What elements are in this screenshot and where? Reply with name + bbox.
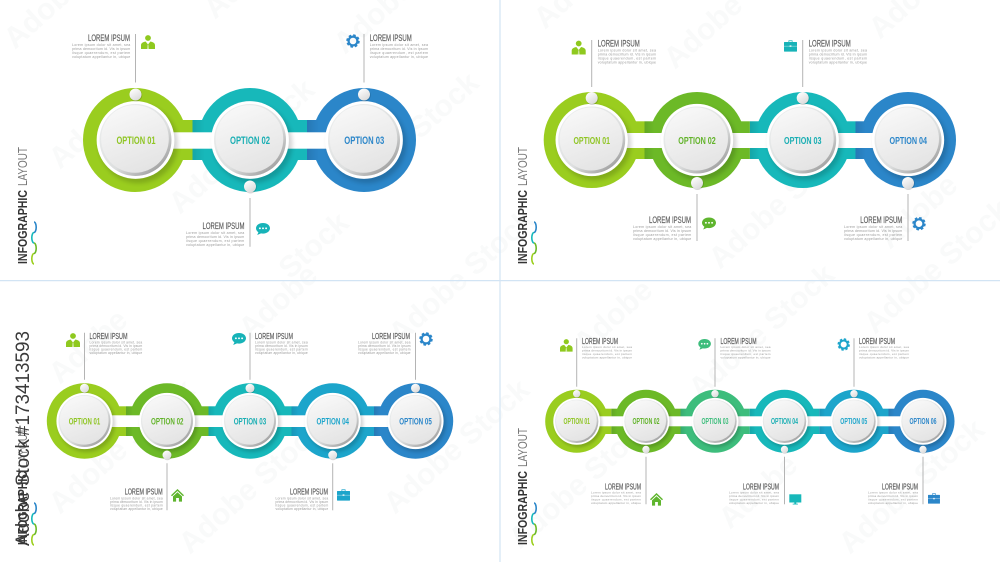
callout 1: LOREM IPSUM (582, 337, 618, 346)
callout 1: iisque quaerendum, est partem (582, 352, 632, 356)
callout 3: iisque quaerendum, est partem (720, 352, 771, 356)
option 01 ring (47, 383, 126, 459)
white connector band (577, 416, 923, 426)
callout 1: Lorem ipsum dolor sit amet, sea (90, 340, 142, 344)
option 02 button: OPTION 02 (678, 135, 716, 147)
side title: INFOGRAPHIC (15, 190, 30, 264)
wave logo (532, 503, 536, 545)
option 02 ring (192, 88, 307, 192)
option 06 button: OPTION 06 (910, 417, 937, 426)
callout 4: LOREM IPSUM (860, 215, 902, 225)
callout 4: iisque quaerendum, est partem (844, 233, 902, 237)
option 01 button (56, 384, 115, 452)
side title: LAYOUT (515, 147, 530, 186)
callout 3: prima democritum id. Vis in ipsum (370, 47, 428, 51)
option 03 button: OPTION 03 (234, 416, 266, 426)
watermarks: Stock (403, 66, 486, 145)
callout 5 (358, 332, 432, 380)
callout 4: prima democritum id. Vis in ipsum (729, 494, 779, 498)
callout 2: LOREM IPSUM (649, 215, 691, 225)
option 02 button (139, 393, 198, 460)
option 01 button: OPTION 01 (116, 135, 156, 147)
callout 6 (868, 457, 940, 505)
callout 2: prima democritum id. Vis in ipsum (591, 494, 641, 498)
icon: speech bubble (256, 223, 270, 235)
option 03 ring (208, 383, 292, 459)
option 05 button: OPTION 05 (840, 417, 868, 426)
callout 1: prima democritum id. Vis in ipsum (598, 52, 656, 56)
option 01 ring (545, 390, 611, 453)
option 03 ring (680, 390, 750, 453)
callout 2: Lorem ipsum dolor sit amet, sea (110, 496, 163, 500)
option 04 button (305, 393, 363, 460)
side title: INFOGRAPHIC (15, 471, 30, 545)
callout 5: LOREM IPSUM (859, 337, 895, 346)
option 05 ring (374, 383, 453, 459)
option 02 button: OPTION 02 (632, 417, 660, 426)
option 05 button (831, 390, 880, 447)
option 06 button (900, 398, 949, 454)
white connector band (135, 132, 364, 149)
watermarks: Adobe (43, 303, 134, 390)
panel: four options (515, 38, 956, 264)
callout 4: voluptatum appellantur in, ubique (844, 237, 902, 241)
watermarks: Adobe (713, 448, 804, 535)
callout 6: Lorem ipsum dolor sit amet, sea (868, 491, 918, 495)
callout 2: Lorem ipsum dolor sit amet, sea (591, 491, 641, 495)
icon: house (650, 493, 663, 506)
callout 3: prima democritum id. Vis in ipsum (255, 344, 308, 348)
callout 3: prima democritum id. Vis in ipsum (809, 52, 867, 56)
watermarks: Stock (273, 206, 356, 285)
side title: LAYOUT (515, 428, 530, 467)
option 03 button (767, 92, 842, 180)
callout 2: prima democritum id. Vis in ipsum (110, 500, 163, 504)
callout 3: voluptatum appellantur in, ubique (720, 355, 771, 359)
callout 1: iisque quaerendum, est partem (90, 348, 142, 352)
callout 3: iisque quaerendum, est partem (255, 348, 308, 352)
callout 2: iisque quaerendum, est partem (110, 504, 163, 508)
icon: gear (347, 35, 359, 47)
option 02 button: OPTION 02 (151, 416, 184, 426)
callout 4 (276, 463, 350, 511)
callout 3: LOREM IPSUM (720, 337, 756, 346)
callout 1: LOREM IPSUM (90, 332, 128, 341)
callout 6: iisque quaerendum, est partem (868, 497, 918, 501)
callout 1: prima democritum id. Vis in ipsum (582, 349, 632, 353)
callout 2: voluptatum appellantur in, ubique (186, 243, 244, 247)
callout 5: Lorem ipsum dolor sit amet, sea (859, 345, 909, 349)
callout 1: Lorem ipsum dolor sit amet, sea (582, 345, 632, 349)
option 04 ring (750, 390, 819, 453)
callout 5: iisque quaerendum, est partem (859, 352, 909, 356)
icon: person (560, 339, 573, 352)
callout 2: voluptatum appellantur in, ubique (591, 501, 641, 505)
callout 1: voluptatum appellantur in, ubique (598, 60, 656, 64)
option 03 button (325, 88, 406, 183)
callout 1 (560, 337, 632, 387)
option 05 ring (819, 390, 888, 453)
option 03 button (222, 384, 281, 452)
icon: gear (913, 218, 925, 230)
callout 2: LOREM IPSUM (125, 488, 163, 496)
callout 3: Lorem ipsum dolor sit amet, sea (809, 48, 867, 52)
callout 5: voluptatum appellantur in, ubique (859, 355, 909, 359)
callout 6: voluptatum appellantur in, ubique (868, 501, 918, 505)
callout 4: prima democritum id. Vis in ipsum (276, 500, 328, 504)
callout 1 (66, 332, 142, 380)
callout 2: Lorem ipsum dolor sit amet, sea (633, 225, 691, 229)
callout 3 (232, 332, 308, 380)
watermarks: Adobe Stock (833, 413, 991, 560)
callout 5: prima democritum id. Vis in ipsum (859, 349, 909, 353)
callout 3: iisque quaerendum, est partem (370, 51, 428, 55)
callout 2: voluptatum appellantur in, ubique (110, 507, 163, 511)
callout 4: Lorem ipsum dolor sit amet, sea (729, 491, 779, 495)
option 04 button (761, 398, 810, 454)
option 01 button (556, 92, 631, 180)
callout 3: Lorem ipsum dolor sit amet, sea (720, 345, 771, 349)
callout 1: voluptatum appellantur in, ubique (90, 351, 142, 355)
option 02 ring (611, 390, 680, 453)
icon: gear (838, 339, 849, 350)
callout 2: prima democritum id. Vis in ipsum (186, 235, 244, 239)
callout 3: voluptatum appellantur in, ubique (255, 351, 308, 355)
option 01 button (97, 88, 178, 183)
icon: briefcase (928, 493, 940, 504)
watermarks: Adobe (873, 168, 964, 255)
callout 6: prima democritum id. Vis in ipsum (868, 494, 918, 498)
callout 2 (186, 198, 270, 247)
callout 3: Lorem ipsum dolor sit amet, sea (255, 340, 308, 344)
callout 6: LOREM IPSUM (882, 482, 918, 492)
panel: five options (13, 331, 453, 546)
option 02 button (211, 101, 292, 193)
side title: LAYOUT (15, 428, 30, 467)
callout 5 (838, 337, 909, 387)
callout 1: LOREM IPSUM (88, 33, 130, 43)
option 03 button: OPTION 03 (784, 135, 822, 147)
icon: briefcase (337, 489, 350, 501)
watermarks: Adobe (43, 88, 134, 175)
callout 4: iisque quaerendum, est partem (729, 497, 779, 501)
option 04 button: OPTION 04 (890, 135, 927, 147)
watermarks: Adobe Stock (43, 373, 201, 520)
callout 2: voluptatum appellantur in, ubique (633, 237, 691, 241)
callout 1: iisque quaerendum, est partem (72, 51, 130, 55)
icon: briefcase (784, 40, 797, 52)
callout 1: prima democritum id. Vis in ipsum (90, 344, 142, 348)
option 03 ring (750, 92, 856, 188)
callout 2: Lorem ipsum dolor sit amet, sea (186, 231, 244, 235)
callout 2 (591, 457, 663, 506)
option 01 button (553, 390, 602, 447)
callout 2: LOREM IPSUM (605, 482, 641, 492)
callout 3 (784, 38, 867, 87)
callout 1 (72, 33, 155, 82)
callout 3: Lorem ipsum dolor sit amet, sea (370, 43, 428, 47)
stock id stamp: #173413593 (13, 331, 34, 436)
callout 4 (729, 457, 801, 505)
icon: gear (420, 333, 432, 345)
callout 4: Lorem ipsum dolor sit amet, sea (844, 225, 902, 229)
stock id stamp: Adobe Stock (13, 439, 34, 546)
callout 3: voluptatum appellantur in, ubique (809, 60, 867, 64)
panel: three options (15, 33, 428, 264)
icon: person (141, 35, 155, 49)
callout 4: voluptatum appellantur in, ubique (276, 507, 328, 511)
wave logo (32, 503, 36, 545)
callout 4: Lorem ipsum dolor sit amet, sea (276, 496, 328, 500)
callout 2 (633, 194, 716, 241)
white connector band (84, 415, 416, 427)
callout 3: LOREM IPSUM (370, 33, 412, 43)
callout 1: voluptatum appellantur in, ubique (582, 355, 632, 359)
callout 2 (110, 463, 184, 511)
watermarks: Adobe Stock (173, 413, 331, 560)
icon: person (66, 333, 80, 347)
option 03 ring (307, 88, 416, 192)
callout 5: prima democritum id. Vis in ipsum (358, 344, 411, 348)
panel: six options (515, 337, 954, 545)
option 02 button: OPTION 02 (230, 135, 270, 147)
callout 3: prima democritum id. Vis in ipsum (720, 349, 771, 353)
callout 2: LOREM IPSUM (202, 221, 244, 231)
icon: person (572, 41, 586, 54)
watermarks: Adobe Stock (383, 203, 541, 350)
wave logo (532, 222, 536, 264)
option 01 ring (83, 88, 192, 192)
callout 5: iisque quaerendum, est partem (358, 348, 411, 352)
option 04 ring (292, 383, 374, 459)
callout 1: LOREM IPSUM (598, 38, 640, 48)
option 03 button: OPTION 03 (344, 135, 384, 147)
icon: speech bubble (698, 339, 711, 350)
watermarks: Adobe Stock (163, 73, 321, 220)
watermarks: Adobe Stock (378, 373, 536, 520)
option 03 button: OPTION 03 (702, 417, 729, 426)
option 03 button (692, 390, 741, 447)
callout 2: iisque quaerendum, est partem (591, 497, 641, 501)
watermarks: Adobe (233, 258, 324, 345)
option 01 ring (544, 92, 644, 188)
option 04 ring (856, 92, 956, 188)
callout 2: iisque quaerendum, est partem (186, 239, 244, 243)
callout 2: prima democritum id. Vis in ipsum (633, 229, 691, 233)
callout 4: prima democritum id. Vis in ipsum (844, 229, 902, 233)
icon: speech bubble (232, 333, 246, 345)
callout 3 (698, 337, 771, 387)
option 04 button: OPTION 04 (316, 416, 349, 426)
wave logo (32, 222, 36, 264)
callout 1 (572, 38, 656, 87)
option 05 button (387, 384, 446, 452)
callout 3 (347, 33, 428, 82)
callout 5: voluptatum appellantur in, ubique (358, 351, 411, 355)
callout 1: iisque quaerendum, est partem (598, 56, 656, 60)
side title: LAYOUT (15, 147, 30, 186)
callout 4: voluptatum appellantur in, ubique (729, 501, 779, 505)
callout 4: iisque quaerendum, est partem (276, 504, 328, 508)
side title: INFOGRAPHIC (515, 190, 530, 264)
option 05 button: OPTION 05 (399, 416, 432, 426)
callout 5: LOREM IPSUM (372, 332, 410, 341)
option 01 button: OPTION 01 (574, 135, 610, 147)
watermarks: Adobe Stock (703, 128, 861, 275)
callout 3: voluptatum appellantur in, ubique (370, 55, 428, 59)
icon: speech bubble (702, 218, 716, 230)
callout 3: iisque quaerendum, est partem (809, 56, 867, 60)
stock id stamp (13, 331, 34, 546)
option 04 button (872, 104, 948, 190)
callout 1: prima democritum id. Vis in ipsum (72, 47, 130, 51)
option 04 button: OPTION 04 (771, 417, 798, 426)
watermarks: Adobe Stock (683, 258, 841, 405)
option 06 ring (888, 390, 954, 453)
callout 3: LOREM IPSUM (809, 38, 851, 48)
callout 1: Lorem ipsum dolor sit amet, sea (72, 43, 130, 47)
callout 1: Lorem ipsum dolor sit amet, sea (598, 48, 656, 52)
side title: INFOGRAPHIC (515, 471, 530, 545)
white connector band (592, 133, 908, 148)
option 02 ring (644, 92, 750, 188)
callout 3: LOREM IPSUM (255, 332, 293, 341)
callout 1: voluptatum appellantur in, ubique (72, 55, 130, 59)
watermarks: Adobe Stock (503, 408, 661, 555)
callout 4 (844, 194, 925, 241)
option 01 button: OPTION 01 (69, 416, 100, 426)
option 02 ring (126, 383, 208, 459)
callout 4: LOREM IPSUM (290, 488, 328, 496)
option 02 button (661, 104, 737, 190)
callout 4: LOREM IPSUM (743, 482, 779, 492)
option 02 button (623, 398, 672, 454)
icon: house (171, 489, 184, 502)
callout 5: Lorem ipsum dolor sit amet, sea (358, 340, 411, 344)
option 01 button: OPTION 01 (564, 417, 590, 426)
icon: monitor (789, 494, 801, 504)
callout 2: iisque quaerendum, est partem (633, 233, 691, 237)
watermarks: Adobe (568, 273, 659, 360)
